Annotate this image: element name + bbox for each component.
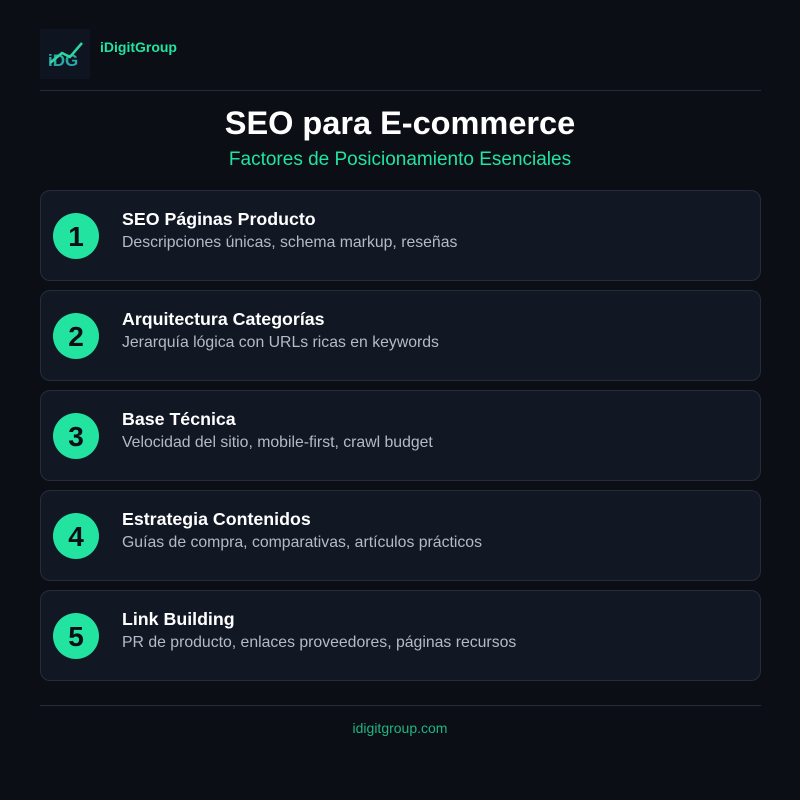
card 1: 1 <box>68 221 84 252</box>
card 2 <box>40 290 761 381</box>
card 2: Jerarquía lógica con URLs ricas en keywords <box>122 334 439 351</box>
card 5: PR de producto, enlaces proveedores, páginas recursos <box>122 634 516 651</box>
card 5: Link Building <box>122 609 235 629</box>
card 5: 5 <box>68 621 84 652</box>
card 3 <box>40 390 761 481</box>
card 5 <box>40 590 761 681</box>
card 4: Guías de compra, comparativas, artículos prácticos <box>122 534 482 551</box>
card 3: Velocidad del sitio, mobile-first, crawl budget <box>122 434 433 451</box>
title: SEO para E-commerce <box>225 105 575 141</box>
card 3: Base Técnica <box>122 409 236 429</box>
card 1 <box>40 190 761 281</box>
card 4: 4 <box>68 521 84 552</box>
footer: idigitgroup.com <box>353 720 447 736</box>
card 4 <box>40 490 761 581</box>
logo <box>40 29 90 79</box>
brand name: iDigitGroup <box>100 39 177 55</box>
card 1: Descripciones únicas, schema markup, reseñas <box>122 234 457 251</box>
logo: iDG <box>48 51 78 70</box>
card 4: Estrategia Contenidos <box>122 509 311 529</box>
card 2: 2 <box>68 321 84 352</box>
card 3: 3 <box>68 421 84 452</box>
card 1: SEO Páginas Producto <box>122 209 316 229</box>
card 2: Arquitectura Categorías <box>122 309 325 329</box>
subtitle: Factores de Posicionamiento Esenciales <box>229 149 571 170</box>
